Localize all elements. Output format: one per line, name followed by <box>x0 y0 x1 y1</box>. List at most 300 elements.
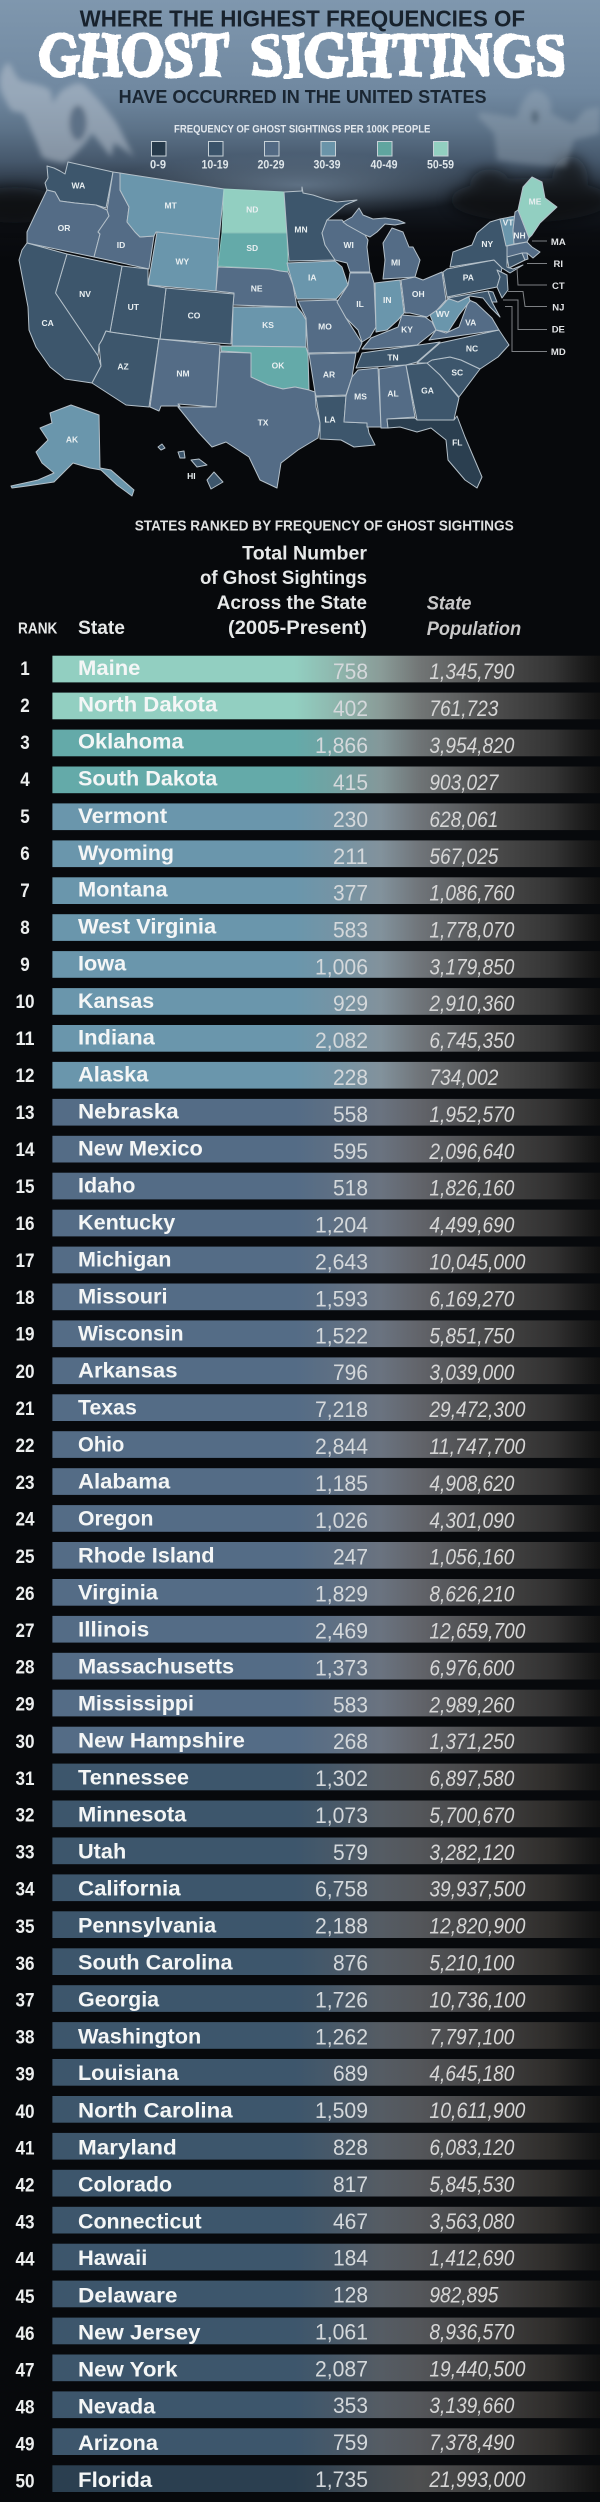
row 15 Idaho: 15 <box>16 1177 35 1198</box>
row 30 New Hampshire: 30 <box>16 1732 34 1753</box>
state NJ <box>497 270 508 298</box>
row 48 Nevada: 3,139,660 <box>429 2393 515 2418</box>
legend <box>150 124 454 172</box>
row 32 Minnesota: Minnesota <box>78 1803 187 1826</box>
state CO <box>160 288 234 344</box>
row 28 Massachusetts <box>16 1653 600 1680</box>
title <box>38 6 566 107</box>
row 23 Alabama: 4,908,620 <box>429 1471 515 1496</box>
row 48 Nevada <box>16 2391 600 2419</box>
row 44 Hawaii: 44 <box>16 2249 35 2270</box>
row 33 Utah: Utah <box>78 1840 126 1863</box>
title line 2 <box>38 22 566 90</box>
state CA: CA <box>42 318 54 328</box>
state GA: GA <box>421 386 434 396</box>
row 17 Michigan: 10,045,000 <box>429 1249 526 1274</box>
row 29 Mississippi: 2,989,260 <box>429 1692 515 1717</box>
row 6 Wyoming: 567,025 <box>429 844 499 869</box>
state HI <box>158 444 223 489</box>
state ME <box>518 177 557 238</box>
state UT: UT <box>128 302 140 312</box>
state SC <box>427 357 480 397</box>
row 42 Colorado: Colorado <box>78 2173 172 2196</box>
leader line and label MA <box>532 237 566 248</box>
row 2 North Dakota: 761,723 <box>429 696 499 721</box>
row 17 Michigan <box>16 1247 600 1274</box>
row 33 Utah: 33 <box>16 1843 34 1864</box>
title line 2: SIGHTINGS <box>251 22 566 90</box>
row 22 Ohio: 22 <box>16 1436 34 1457</box>
leader line and label DE: DE <box>552 324 565 336</box>
row 28 Massachusetts: 28 <box>16 1658 34 1679</box>
state PA <box>443 260 502 297</box>
state WV: WV <box>436 309 450 319</box>
row 14 New Mexico: New Mexico <box>78 1138 203 1161</box>
state SD <box>218 233 288 272</box>
state NH <box>513 210 529 244</box>
header total sightings: of Ghost Sightings <box>200 567 367 589</box>
row 21 Texas: 21 <box>16 1399 35 1420</box>
row 39 Louisiana: 39 <box>16 2064 34 2086</box>
state AZ: AZ <box>117 362 129 372</box>
state MT <box>120 173 224 239</box>
state MD <box>447 291 500 317</box>
row 20 Arkansas: 3,039,000 <box>429 1360 515 1385</box>
row 45 Delaware: 982,895 <box>429 2282 499 2307</box>
legend item 40-49 <box>370 142 398 172</box>
row 40 North Carolina: 40 <box>16 2102 34 2123</box>
header rank: RANK <box>18 620 58 637</box>
legend item 30-39 <box>314 142 341 172</box>
row 7 Montana: 1,086,760 <box>429 881 515 906</box>
state IL: IL <box>356 299 364 309</box>
row 18 Missouri: 18 <box>16 1288 34 1309</box>
row 29 Mississippi: 29 <box>16 1695 34 1716</box>
row 42 Colorado: 42 <box>16 2176 34 2197</box>
state OK <box>221 346 309 390</box>
row 49 Arizona: 759 <box>333 2430 368 2455</box>
row 13 Nebraska: Nebraska <box>78 1101 179 1124</box>
row 48 Nevada: 48 <box>16 2398 34 2419</box>
row 19 Wisconsin: 5,851,750 <box>429 1323 515 1348</box>
state AL <box>379 365 415 428</box>
row 44 Hawaii: 1,412,690 <box>429 2246 515 2271</box>
row 41 Maryland: 41 <box>16 2139 35 2160</box>
state MO: MO <box>318 321 332 331</box>
row 32 Minnesota <box>16 1800 600 1828</box>
row 9 Iowa: 3,179,850 <box>429 954 515 979</box>
row 31 Tennessee: 31 <box>16 1769 35 1790</box>
row 42 Colorado: 817 <box>333 2172 368 2197</box>
state MS: MS <box>354 392 367 402</box>
row 34 California: 39,937,500 <box>429 1877 526 1902</box>
row 15 Idaho: 1,826,160 <box>429 1176 515 1201</box>
state NM: NM <box>176 368 190 378</box>
row 16 Kentucky: 4,499,690 <box>429 1213 515 1238</box>
row 6 Wyoming: 211 <box>333 844 368 869</box>
row 24 Oregon: 24 <box>16 1510 35 1531</box>
row 22 Ohio: 2,844 <box>315 1434 368 1459</box>
row 23 Alabama: Alabama <box>78 1470 171 1493</box>
header total sightings <box>200 542 367 639</box>
state NM <box>150 339 220 411</box>
row 26 Virginia: 26 <box>16 1584 34 1605</box>
state CT <box>507 253 525 268</box>
row 26 Virginia: Virginia <box>78 1582 158 1605</box>
state MA <box>507 242 540 258</box>
row 11 Indiana: 11 <box>16 1029 35 1050</box>
row 7 Montana: 7 <box>20 881 30 902</box>
row 6 Wyoming: 6 <box>20 844 30 865</box>
state AR <box>309 353 356 396</box>
row 7 Montana <box>20 877 600 906</box>
state AK: AK <box>66 434 79 444</box>
ghost illustration left <box>0 63 134 163</box>
row 25 Rhode Island: 25 <box>16 1547 35 1568</box>
row 1 Maine: 1 <box>20 659 30 680</box>
row 12 Alaska: 228 <box>333 1065 368 1090</box>
state ME: ME <box>529 197 542 207</box>
row 11 Indiana: 2,082 <box>315 1028 368 1053</box>
row 28 Massachusetts: Massachusetts <box>78 1655 234 1678</box>
row 19 Wisconsin: Wisconsin <box>78 1322 184 1345</box>
state VT: VT <box>503 218 514 228</box>
state RI <box>522 253 528 260</box>
state KY <box>362 315 436 349</box>
row 49 Arizona: 49 <box>16 2435 34 2456</box>
row 9 Iowa: Iowa <box>78 952 127 975</box>
row 17 Michigan: 2,643 <box>315 1249 368 1274</box>
legend item 10-19: 10-19 <box>202 158 229 172</box>
table heading: STATES RANKED BY FREQUENCY OF GHOST SIGHTINGS <box>135 518 514 535</box>
row 24 Oregon <box>16 1505 600 1533</box>
row 31 Tennessee: 1,302 <box>315 1766 368 1791</box>
row 46 New Jersey: 46 <box>16 2324 34 2345</box>
row 24 Oregon: Oregon <box>78 1507 153 1530</box>
row 22 Ohio <box>16 1431 600 1459</box>
row 5 Vermont: 628,061 <box>429 807 498 832</box>
row 3 Oklahoma: Oklahoma <box>78 731 184 754</box>
row 4 South Dakota <box>20 766 600 795</box>
header total sightings: (2005-Present) <box>228 617 367 639</box>
row 15 Idaho: Idaho <box>78 1175 135 1198</box>
row 18 Missouri: 6,169,270 <box>429 1286 515 1311</box>
row 17 Michigan: 17 <box>16 1251 34 1272</box>
state WI <box>322 220 370 272</box>
row 37 Georgia: 1,726 <box>315 1987 368 2012</box>
row 37 Georgia: 37 <box>16 1991 34 2012</box>
state VA <box>429 300 499 340</box>
row 39 Louisiana: Louisiana <box>78 2062 179 2085</box>
row 4 South Dakota: 4 <box>20 770 30 791</box>
state CO: CO <box>188 311 201 321</box>
state MT: MT <box>165 201 178 211</box>
row 9 Iowa: 1,006 <box>315 954 368 979</box>
state MI upper <box>343 208 405 237</box>
row 39 Louisiana: 689 <box>333 2061 368 2086</box>
row 10 Kansas: Kansas <box>78 990 154 1013</box>
row 18 Missouri: 1,593 <box>315 1286 368 1311</box>
row 21 Texas: Texas <box>78 1397 137 1420</box>
row 39 Louisiana: 4,645,180 <box>429 2061 515 2086</box>
row 13 Nebraska <box>16 1099 600 1127</box>
row 32 Minnesota: 1,073 <box>315 1803 368 1828</box>
state WY <box>148 232 219 291</box>
title line 1: WHERE THE HIGHEST FREQUENCIES OF <box>80 6 525 32</box>
row 1 Maine: Maine <box>78 657 140 680</box>
row 6 Wyoming: Wyoming <box>78 842 174 865</box>
row 26 Virginia: 1,829 <box>315 1582 368 1607</box>
state AZ <box>92 331 159 407</box>
row 21 Texas: 29,472,300 <box>429 1397 526 1422</box>
state HI: HI <box>187 471 196 481</box>
state WA <box>45 162 113 208</box>
state IN <box>375 280 404 332</box>
state MN: MN <box>294 224 308 234</box>
row 34 California: California <box>78 1877 181 1900</box>
state LA: LA <box>324 414 336 424</box>
row 8 West Virginia: 8 <box>20 918 30 939</box>
state OH <box>401 272 446 317</box>
legend item 30-39: 30-39 <box>314 158 341 172</box>
row 35 Pennsylvania: Pennsylvania <box>78 1915 217 1938</box>
state PA: PA <box>463 272 474 282</box>
row 35 Pennsylvania: 12,820,900 <box>429 1914 526 1939</box>
row 16 Kentucky: 1,204 <box>315 1213 368 1238</box>
row 8 West Virginia <box>20 914 600 943</box>
state SC: SC <box>451 368 463 378</box>
row 13 Nebraska: 1,952,570 <box>429 1102 515 1127</box>
row 39 Louisiana <box>16 2059 600 2086</box>
row 4 South Dakota: South Dakota <box>78 768 218 791</box>
header state population: State <box>427 592 472 614</box>
row 31 Tennessee: 6,897,580 <box>429 1766 515 1791</box>
state WI: WI <box>344 240 354 250</box>
row 19 Wisconsin <box>16 1320 600 1348</box>
row 37 Georgia <box>16 1985 600 2012</box>
header state: State <box>78 617 125 639</box>
state MI <box>383 228 420 279</box>
row 41 Maryland <box>16 2133 600 2160</box>
state OR: OR <box>58 223 70 233</box>
row 2 North Dakota: 2 <box>20 696 30 717</box>
row 19 Wisconsin: 19 <box>16 1325 34 1346</box>
legend item 10-19 <box>202 142 229 172</box>
state LA <box>316 396 375 447</box>
state NY <box>450 219 523 273</box>
row 27 Illinois: 12,659,700 <box>429 1619 526 1644</box>
row 15 Idaho <box>16 1173 600 1201</box>
state NY: NY <box>481 239 494 249</box>
row 10 Kansas <box>16 988 600 1016</box>
row 33 Utah <box>16 1838 600 1865</box>
row 27 Illinois: 27 <box>16 1621 34 1642</box>
state TX: TX <box>258 418 269 428</box>
leader line and label NJ: NJ <box>552 302 564 314</box>
legend item 40-49: 40-49 <box>370 158 398 172</box>
row 47 New York: New York <box>78 2358 178 2381</box>
state NH: NH <box>513 231 526 241</box>
row 36 South Carolina: 36 <box>16 1954 34 1975</box>
state OK: OK <box>272 360 285 370</box>
row 8 West Virginia: 1,778,070 <box>429 918 515 943</box>
row 36 South Carolina: 876 <box>333 1951 368 1976</box>
leader line and label DE <box>503 300 565 336</box>
row 33 Utah: 579 <box>333 1840 368 1865</box>
row 4 South Dakota: 415 <box>333 770 368 795</box>
leader line and label NJ <box>508 292 564 314</box>
row 14 New Mexico: 595 <box>333 1139 368 1164</box>
state FL <box>387 416 482 488</box>
row 10 Kansas: 929 <box>333 991 368 1016</box>
state WV <box>430 297 470 332</box>
row 40 North Carolina: North Carolina <box>78 2100 233 2122</box>
leader line and label RI: RI <box>554 259 563 270</box>
row 12 Alaska: 734,002 <box>429 1065 498 1090</box>
state IA: IA <box>308 272 317 282</box>
row 41 Maryland: 828 <box>333 2135 368 2160</box>
row 20 Arkansas <box>16 1357 600 1385</box>
header state population: Population <box>427 618 521 640</box>
state IA <box>287 261 348 299</box>
row 25 Rhode Island: Rhode Island <box>78 1545 215 1568</box>
row 16 Kentucky: Kentucky <box>78 1212 176 1235</box>
row 29 Mississippi <box>16 1690 600 1717</box>
row 50 Florida: Florida <box>78 2469 153 2492</box>
row 44 Hawaii: 184 <box>333 2246 368 2271</box>
leader line and label MD <box>505 306 566 358</box>
row 14 New Mexico: 14 <box>16 1140 35 1161</box>
row 45 Delaware <box>16 2281 600 2308</box>
row 5 Vermont: 230 <box>333 807 368 832</box>
legend item 0-9: 0-9 <box>150 158 166 172</box>
state VA: VA <box>465 317 476 327</box>
row 41 Maryland: Maryland <box>78 2136 177 2159</box>
leader line and label MA: MA <box>551 237 566 248</box>
state MS <box>344 368 381 427</box>
state AK <box>11 405 134 496</box>
state UT <box>110 266 166 339</box>
state DE <box>488 291 497 302</box>
row 27 Illinois: 2,469 <box>315 1619 368 1644</box>
row 20 Arkansas: 20 <box>16 1362 34 1383</box>
row 43 Connecticut: 3,563,080 <box>429 2209 515 2234</box>
row 23 Alabama: 23 <box>16 1473 34 1494</box>
row 34 California: 6,758 <box>315 1877 368 1902</box>
row 49 Arizona <box>16 2428 600 2456</box>
state ID: ID <box>117 240 125 250</box>
row 13 Nebraska: 13 <box>16 1103 34 1124</box>
row 4 South Dakota: 903,027 <box>429 770 499 795</box>
row 45 Delaware: 45 <box>16 2287 35 2308</box>
row 32 Minnesota: 5,700,670 <box>429 1803 515 1828</box>
row 24 Oregon: 4,301,090 <box>429 1508 515 1533</box>
row 22 Ohio: Ohio <box>78 1433 124 1456</box>
title line 3: HAVE OCCURRED IN THE UNITED STATES <box>119 86 487 107</box>
legend item 50-59 <box>427 142 454 172</box>
map of United States <box>11 162 566 496</box>
row 12 Alaska: 12 <box>16 1066 34 1087</box>
row 3 Oklahoma: 1,866 <box>315 733 368 758</box>
row 26 Virginia <box>16 1579 600 1607</box>
row 20 Arkansas: Arkansas <box>78 1360 178 1383</box>
row 32 Minnesota: 32 <box>16 1806 34 1827</box>
legend item 20-29 <box>258 142 285 172</box>
row 35 Pennsylvania <box>16 1911 600 1938</box>
state TX <box>178 352 320 488</box>
row 12 Alaska <box>16 1062 600 1090</box>
row 49 Arizona: Arizona <box>78 2432 158 2455</box>
row 23 Alabama <box>16 1468 600 1496</box>
row 15 Idaho: 518 <box>333 1176 368 1201</box>
row 1 Maine: 1,345,790 <box>429 659 515 684</box>
state MO <box>298 300 362 353</box>
row 31 Tennessee <box>16 1764 600 1791</box>
row 27 Illinois <box>16 1616 600 1644</box>
state MI: MI <box>391 258 400 268</box>
row 37 Georgia: Georgia <box>78 1988 159 2011</box>
row 21 Texas <box>16 1394 600 1422</box>
state VT <box>500 216 515 246</box>
row 12 Alaska: Alaska <box>78 1064 149 1087</box>
leader line and label CT: CT <box>552 281 565 292</box>
state ND: ND <box>246 205 258 215</box>
row 40 North Carolina: 1,509 <box>315 2098 368 2123</box>
row 5 Vermont <box>20 803 600 832</box>
header state population <box>427 592 521 640</box>
row 3 Oklahoma <box>20 730 600 758</box>
state NV: NV <box>79 289 91 299</box>
row 9 Iowa <box>20 951 600 980</box>
row 11 Indiana <box>16 1025 600 1053</box>
row 2 North Dakota: North Dakota <box>78 694 218 717</box>
row 49 Arizona: 7,378,490 <box>429 2430 515 2455</box>
row 25 Rhode Island: 1,056,160 <box>429 1545 515 1570</box>
row 34 California: 34 <box>16 1880 35 1901</box>
row 18 Missouri <box>16 1284 600 1311</box>
state CA <box>19 243 101 383</box>
row 30 New Hampshire: New Hampshire <box>78 1730 245 1753</box>
row 21 Texas: 7,218 <box>315 1397 368 1422</box>
leader line and label CT <box>517 268 565 292</box>
row 5 Vermont: Vermont <box>78 805 167 828</box>
row 24 Oregon: 1,026 <box>315 1508 368 1533</box>
state IN: IN <box>383 295 392 305</box>
state FL: FL <box>452 438 462 448</box>
state KS: KS <box>262 320 274 330</box>
row 47 New York: 19,440,500 <box>429 2356 526 2381</box>
row 41 Maryland: 6,083,120 <box>429 2135 515 2160</box>
state NC: NC <box>466 343 478 353</box>
row 7 Montana: Montana <box>78 879 168 902</box>
row 38 Washington <box>16 2022 600 2049</box>
state NE: NE <box>251 283 263 293</box>
row 37 Georgia: 10,736,100 <box>429 1987 526 2012</box>
row 31 Tennessee: Tennessee <box>78 1766 189 1789</box>
row 30 New Hampshire: 1,371,250 <box>429 1729 515 1754</box>
row 14 New Mexico: 2,096,640 <box>429 1139 515 1164</box>
row 45 Delaware: Delaware <box>78 2285 178 2308</box>
row 34 California <box>16 1874 600 1902</box>
row 22 Ohio: 11,747,700 <box>429 1434 526 1459</box>
state GA <box>406 363 459 420</box>
row 43 Connecticut: 43 <box>16 2213 34 2234</box>
row 25 Rhode Island: 247 <box>333 1545 368 1570</box>
leader line and label MD: MD <box>551 347 566 358</box>
legend item 50-59: 50-59 <box>427 158 454 172</box>
row 29 Mississippi: Mississippi <box>78 1692 194 1715</box>
state WY: WY <box>175 256 189 266</box>
